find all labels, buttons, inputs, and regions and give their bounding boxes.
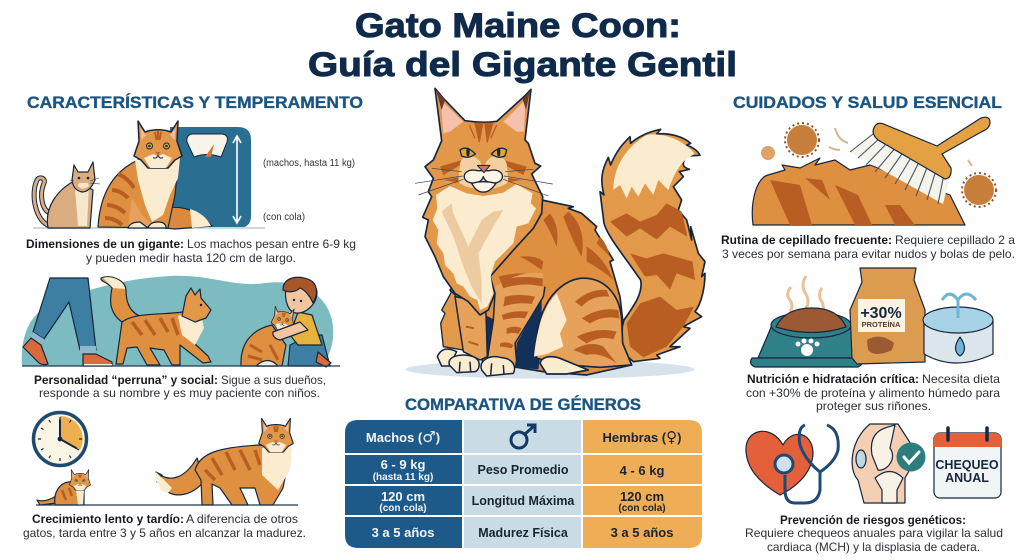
column: parámetros: Longitud Máxima — [472, 494, 575, 508]
text: crecimiento — [23, 512, 306, 540]
main Maine Coon cat illustration — [406, 88, 705, 379]
heading: comparativa: COMPARATIVA DE GÉNEROS — [405, 395, 641, 414]
text: nutrición: Necesita dieta — [922, 372, 1000, 386]
column: parámetros: Peso Promedio — [478, 463, 569, 477]
icon: fur balls — [761, 123, 996, 207]
icon: big Maine Coon sitting — [98, 121, 212, 229]
table: comparativa de géneros — [345, 420, 702, 548]
text: dimensiones: y pueden medir hasta 120 cm de largo. — [86, 251, 296, 265]
whiskers — [415, 168, 553, 196]
text: prevención: cardiaca (MCH) y la displasia de cadera. — [767, 540, 980, 554]
text: personalidad: Personalidad “perruna” y social: — [34, 373, 218, 387]
column: machos: (hasta 11 kg) — [373, 472, 433, 483]
teal blob background — [22, 276, 333, 366]
panel: crecimiento — [34, 412, 298, 505]
icon: clock — [34, 412, 86, 466]
icon: check badge — [896, 442, 926, 472]
text: crecimiento: A diferencia de otros — [186, 512, 298, 526]
text: prevención: Prevención de riesgos genéticos: — [780, 513, 966, 527]
text: cepillado: Requiere cepillado 2 a — [895, 233, 1015, 247]
panel: cepillado — [752, 117, 996, 225]
text: personalidad: Sigue a sus dueños, — [221, 373, 326, 387]
column: hembras: (con cola) — [618, 503, 666, 514]
heading: características y temperamento: CARACTERÍSTICAS Y TEMPERAMENTO — [27, 93, 363, 112]
column: machos: 6 - 9 kg — [381, 457, 425, 472]
column: hembras: Hembras (♀) — [603, 428, 681, 446]
muzzle — [464, 170, 502, 183]
title — [308, 7, 737, 84]
text: nutrición: con +30% de proteína y alimento húmedo para — [746, 386, 1000, 400]
icon: protein bag — [850, 268, 925, 364]
label: machos: (machos, hasta 11 kg) — [263, 158, 355, 169]
icon: child hugging cat — [241, 277, 331, 367]
column: hembras: 4 - 6 kg — [620, 463, 664, 478]
ears — [441, 100, 525, 133]
text: nutrición: proteger sus riñones. — [816, 399, 931, 413]
text: prevención: Requiere chequeos anuales para vigilar la salud — [745, 526, 1003, 540]
icon: protein bag: PROTEÍNA — [862, 320, 901, 329]
text: cepillado — [721, 233, 1015, 261]
text: dimensiones: Dimensiones de un gigante: — [26, 237, 184, 251]
column: machos: Machos (♂) — [366, 428, 440, 446]
column: hembras: 3 a 5 años — [611, 525, 673, 540]
body stripes — [498, 212, 613, 288]
column: hembras: 120 cm — [620, 489, 664, 504]
icon: scale with measuring arrow — [170, 127, 251, 228]
icon: walking cat — [101, 277, 211, 365]
text: crecimiento: Crecimiento lento y tardío: — [32, 512, 184, 526]
eyes — [460, 148, 507, 157]
column: parámetros — [464, 420, 581, 548]
icon: food bowl — [751, 308, 862, 367]
column: machos — [345, 420, 462, 548]
column: machos: 120 cm — [381, 489, 425, 504]
column: parámetros: Madurez Física — [478, 526, 569, 540]
tail — [600, 129, 705, 362]
text: dimensiones — [26, 237, 356, 265]
column: machos: (con cola) — [379, 503, 427, 514]
icon: stethoscope — [775, 425, 838, 503]
panel: prevención — [746, 424, 1001, 503]
panel: personalidad — [22, 276, 340, 367]
icon: adult cat standing — [156, 418, 293, 505]
icon: kitten — [37, 470, 91, 505]
icon: calendar: ANUAL — [945, 471, 989, 485]
text: prevención — [745, 513, 1003, 554]
text: cepillado: Rutina de cepillado frecuente: — [721, 233, 892, 247]
front paws — [437, 349, 515, 376]
icon: protein bag: +30% — [860, 305, 902, 322]
text: nutrición — [746, 372, 1000, 413]
text: crecimiento: gatos, tarda entre 3 y 5 años en alcanzar la madurez. — [23, 526, 306, 540]
ground line — [22, 365, 340, 367]
head and mane silhouette — [415, 88, 553, 315]
column: machos: 3 a 5 años — [372, 525, 434, 540]
text: personalidad — [34, 373, 326, 400]
icon: steam — [788, 276, 824, 313]
cream chest ruff — [433, 184, 536, 310]
panel: dimensiones — [33, 121, 265, 229]
label: con cola: (con cola) — [263, 212, 305, 223]
ground line — [36, 504, 298, 506]
text: dimensiones: Los machos pesan entre 6-9 kg — [187, 237, 356, 251]
icon: brush — [850, 117, 990, 204]
icon: small tan cat — [34, 162, 100, 228]
icon: calendar: CHEQUEO — [935, 458, 999, 472]
body — [450, 200, 632, 375]
icon: heart — [746, 431, 813, 495]
icon: walking owner legs — [23, 278, 112, 366]
heading: cuidados y salud: CUIDADOS Y SALUD ESENCIAL — [733, 93, 1002, 112]
text: personalidad: responde a su nombre y es muy paciente con niños. — [39, 386, 320, 400]
panel: nutrición — [751, 268, 993, 367]
hind leg — [534, 278, 632, 374]
title: Gato Maine Coon: — [355, 7, 681, 45]
icon: water fountain — [923, 294, 993, 363]
title: Guía del Gigante Gentil — [308, 46, 737, 84]
gaps between legs — [485, 300, 542, 369]
forehead and cheek stripes — [469, 123, 497, 142]
back front leg — [455, 297, 487, 360]
icon: knee joint — [852, 424, 918, 503]
ground line — [33, 227, 265, 229]
shadow — [406, 360, 694, 379]
column: hembras — [583, 420, 702, 548]
text: cepillado: 3 veces por semana para evitar nudos y bolas de pelo. — [722, 247, 1015, 261]
front leg — [466, 273, 545, 362]
icon: calendar — [934, 428, 1001, 498]
icon: fur with stripes — [752, 158, 965, 225]
text: nutrición: Nutrición e hidratación crítica: — [747, 372, 919, 386]
elbow fluff — [441, 292, 463, 350]
